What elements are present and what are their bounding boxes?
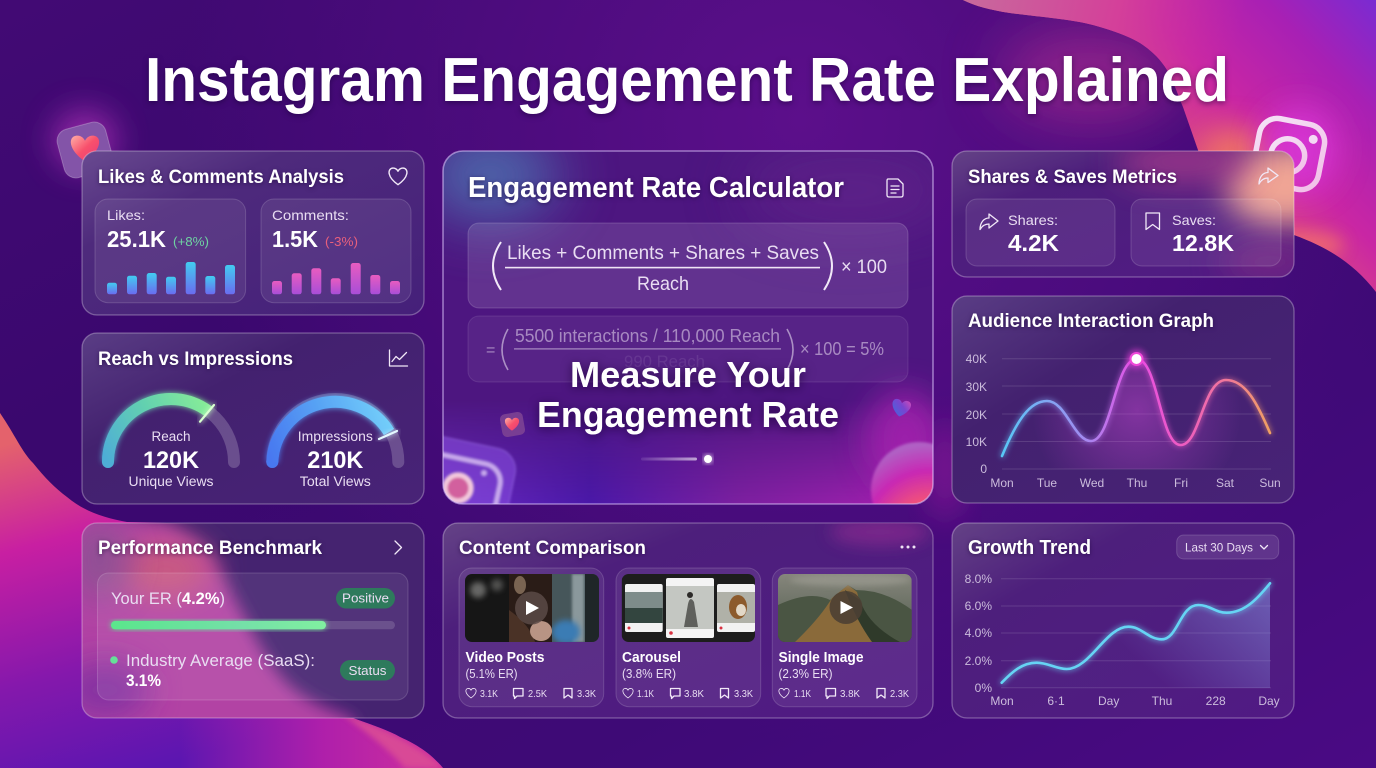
heading: calculator: Engagement Rate Calculator bbox=[468, 172, 844, 204]
dropdown: last 30 days bbox=[1177, 535, 1279, 559]
card: likes: 25.1K bbox=[107, 226, 166, 252]
line chart: audience interaction: 10K bbox=[966, 435, 987, 449]
gauge: impressions: 210K bbox=[307, 447, 364, 474]
card: video posts bbox=[459, 568, 604, 707]
line chart: growth: 8.0% bbox=[965, 572, 992, 586]
panel: growth trend bbox=[952, 523, 1294, 718]
card: comments: 1.5K bbox=[272, 226, 318, 252]
line chart: audience interaction: Thu bbox=[1127, 476, 1147, 490]
stats row: video posts: 2.5K bbox=[528, 688, 547, 700]
stats row: carousel bbox=[623, 688, 753, 700]
inner benchmark card: Industry Average (SaaS): bbox=[126, 652, 315, 670]
card: single image: Single Image bbox=[778, 650, 864, 666]
badge: positive: Positive bbox=[342, 590, 389, 606]
card: comments bbox=[261, 199, 411, 303]
badge: status bbox=[340, 660, 395, 680]
icon: chevron right bbox=[395, 541, 402, 554]
panel: content comparison bbox=[443, 518, 933, 718]
stats row: video posts: 3.1K bbox=[480, 688, 498, 700]
card: shares: 4.2K bbox=[1008, 230, 1059, 256]
worked example box: 5500 interactions / 110,000 Reach bbox=[515, 326, 780, 346]
gauge: reach bbox=[102, 399, 234, 489]
line chart: audience interaction: Tue bbox=[1037, 476, 1057, 490]
worked example box bbox=[468, 316, 908, 382]
card: carousel: Carousel bbox=[622, 650, 681, 666]
overlay headline bbox=[537, 354, 839, 435]
worked example box: = bbox=[486, 342, 495, 359]
gauge: impressions: Impressions bbox=[298, 429, 373, 444]
heading: audience graph: Audience Interaction Graph bbox=[968, 311, 1214, 332]
card: saves: Saves: bbox=[1172, 212, 1216, 228]
panel: engagement rate calculator bbox=[442, 150, 934, 505]
stats row: single image: 3.8K bbox=[840, 688, 860, 700]
gauge: impressions bbox=[266, 399, 398, 489]
dropdown: last 30 days: Last 30 Days bbox=[1185, 540, 1253, 554]
line chart: audience interaction: Mon bbox=[990, 476, 1014, 490]
card: shares bbox=[966, 199, 1115, 266]
inner benchmark card: 3.1% bbox=[126, 672, 161, 690]
icon: line chart bbox=[390, 350, 408, 366]
badge: status: Status bbox=[348, 663, 387, 678]
line chart: growth: Thu bbox=[1152, 694, 1172, 708]
formula box: Reach bbox=[637, 273, 689, 295]
icon: small heart badge bbox=[499, 411, 526, 438]
line chart: growth: 228 bbox=[1206, 694, 1226, 708]
icon: floating heart badge bbox=[54, 119, 116, 181]
overlay headline: Engagement Rate bbox=[537, 394, 839, 435]
main title: Instagram Engagement Rate Explained bbox=[145, 46, 1229, 115]
line chart: growth: 2.0% bbox=[965, 654, 992, 668]
card: video posts: Video Posts bbox=[466, 650, 544, 666]
line chart: growth: 4.0% bbox=[965, 626, 992, 640]
stats row: carousel: 3.3K bbox=[734, 688, 753, 700]
heading: reach vs impressions: Reach vs Impressions bbox=[98, 349, 293, 370]
stats row: carousel: 3.8K bbox=[684, 688, 704, 700]
line chart: audience interaction: Fri bbox=[1174, 476, 1188, 490]
card: carousel bbox=[616, 568, 761, 707]
line chart: growth: 6·1 bbox=[1047, 694, 1065, 708]
icon: share arrow bbox=[1259, 168, 1278, 184]
line chart: growth: Mon bbox=[990, 694, 1014, 708]
line chart: growth: 6.0% bbox=[965, 599, 992, 613]
line chart: audience interaction: 40K bbox=[966, 352, 987, 366]
card: single image: (2.3% ER) bbox=[778, 667, 832, 681]
card: saves bbox=[1131, 199, 1281, 266]
heading: likes and comments: Likes & Comments Analysis bbox=[98, 167, 344, 188]
bar chart: comments bbox=[272, 263, 400, 294]
gauge: reach: 120K bbox=[143, 447, 200, 474]
image: mountain thumbnail bbox=[778, 574, 912, 642]
gauge: reach: Reach bbox=[152, 429, 190, 444]
image: carousel thumbnail bbox=[622, 574, 755, 642]
formula box: Likes + Comments + Shares + Saves bbox=[507, 242, 819, 264]
heading: content comparison: Content Comparison bbox=[459, 537, 646, 559]
panel: reach vs impressions bbox=[82, 333, 424, 504]
stats row: single image: 1.1K bbox=[794, 688, 811, 700]
worked example box: 990 Reach bbox=[624, 352, 705, 371]
card: video posts: (5.1% ER) bbox=[466, 667, 518, 681]
stats row: video posts bbox=[466, 688, 596, 700]
line chart: growth: Day bbox=[1098, 694, 1119, 708]
icon: small blue heart bbox=[890, 398, 912, 418]
inner benchmark card: Your ER (4.2%) bbox=[111, 590, 225, 608]
card: single image bbox=[772, 568, 917, 707]
line chart: audience interaction: 30K bbox=[966, 380, 987, 394]
icon: document bbox=[887, 179, 903, 197]
slider indicator bbox=[641, 455, 712, 463]
card: comments: Comments: bbox=[272, 207, 349, 223]
line chart: audience interaction: 20K bbox=[966, 408, 987, 422]
overlay headline: Measure Your bbox=[570, 354, 806, 395]
icon: glossy gradient ball bbox=[870, 440, 933, 504]
card: comments: (-3%) bbox=[325, 234, 358, 249]
inner benchmark card bbox=[98, 573, 408, 700]
card: saves: 12.8K bbox=[1172, 230, 1234, 256]
heading: shares and saves: Shares & Saves Metrics bbox=[968, 167, 1177, 188]
card: carousel: (3.8% ER) bbox=[622, 667, 676, 681]
line chart: audience interaction: 0 bbox=[980, 462, 987, 476]
heading: benchmark: Performance Benchmark bbox=[98, 537, 322, 559]
stats row: video posts: 3.3K bbox=[577, 688, 596, 700]
formula box bbox=[468, 223, 908, 308]
gauge: reach: Unique Views bbox=[128, 474, 214, 489]
image: video thumbnail bbox=[465, 574, 599, 644]
panel: likes and comments analysis bbox=[82, 151, 424, 315]
icon: blurred Instagram logo corner bbox=[443, 435, 517, 504]
card: likes: Likes: bbox=[107, 207, 145, 223]
panel: shares and saves metrics bbox=[951, 150, 1295, 278]
icon: heart outline bbox=[389, 168, 407, 185]
line chart: growth: Day bbox=[1258, 694, 1280, 708]
line chart: audience interaction: Wed bbox=[1080, 476, 1104, 490]
line chart: audience interaction: Sun bbox=[1259, 476, 1281, 490]
line chart: growth bbox=[965, 572, 1280, 708]
line chart: growth: 0% bbox=[975, 681, 992, 695]
formula box: × 100 bbox=[841, 256, 887, 278]
icon: more dots bbox=[900, 546, 916, 548]
gauge: impressions: Total Views bbox=[300, 474, 371, 489]
badge: positive bbox=[336, 588, 395, 608]
line chart: audience interaction: Sat bbox=[1216, 476, 1235, 490]
card: likes bbox=[95, 199, 246, 303]
panel: performance benchmark bbox=[81, 522, 425, 719]
stats row: single image: 2.3K bbox=[890, 688, 909, 700]
panel: audience interaction graph bbox=[952, 296, 1294, 503]
card: shares: Shares: bbox=[1008, 212, 1058, 228]
stats row: single image bbox=[779, 688, 909, 700]
line chart: audience interaction bbox=[966, 349, 1281, 490]
heading: growth trend: Growth Trend bbox=[968, 537, 1091, 559]
card: likes: (+8%) bbox=[173, 234, 209, 249]
icon: floating Instagram logo bbox=[1250, 115, 1328, 193]
stats row: carousel: 1.1K bbox=[637, 688, 654, 700]
worked example box: × 100 = 5% bbox=[800, 339, 884, 359]
bar chart: likes bbox=[107, 262, 235, 294]
progress bar: your ER bbox=[111, 621, 395, 629]
